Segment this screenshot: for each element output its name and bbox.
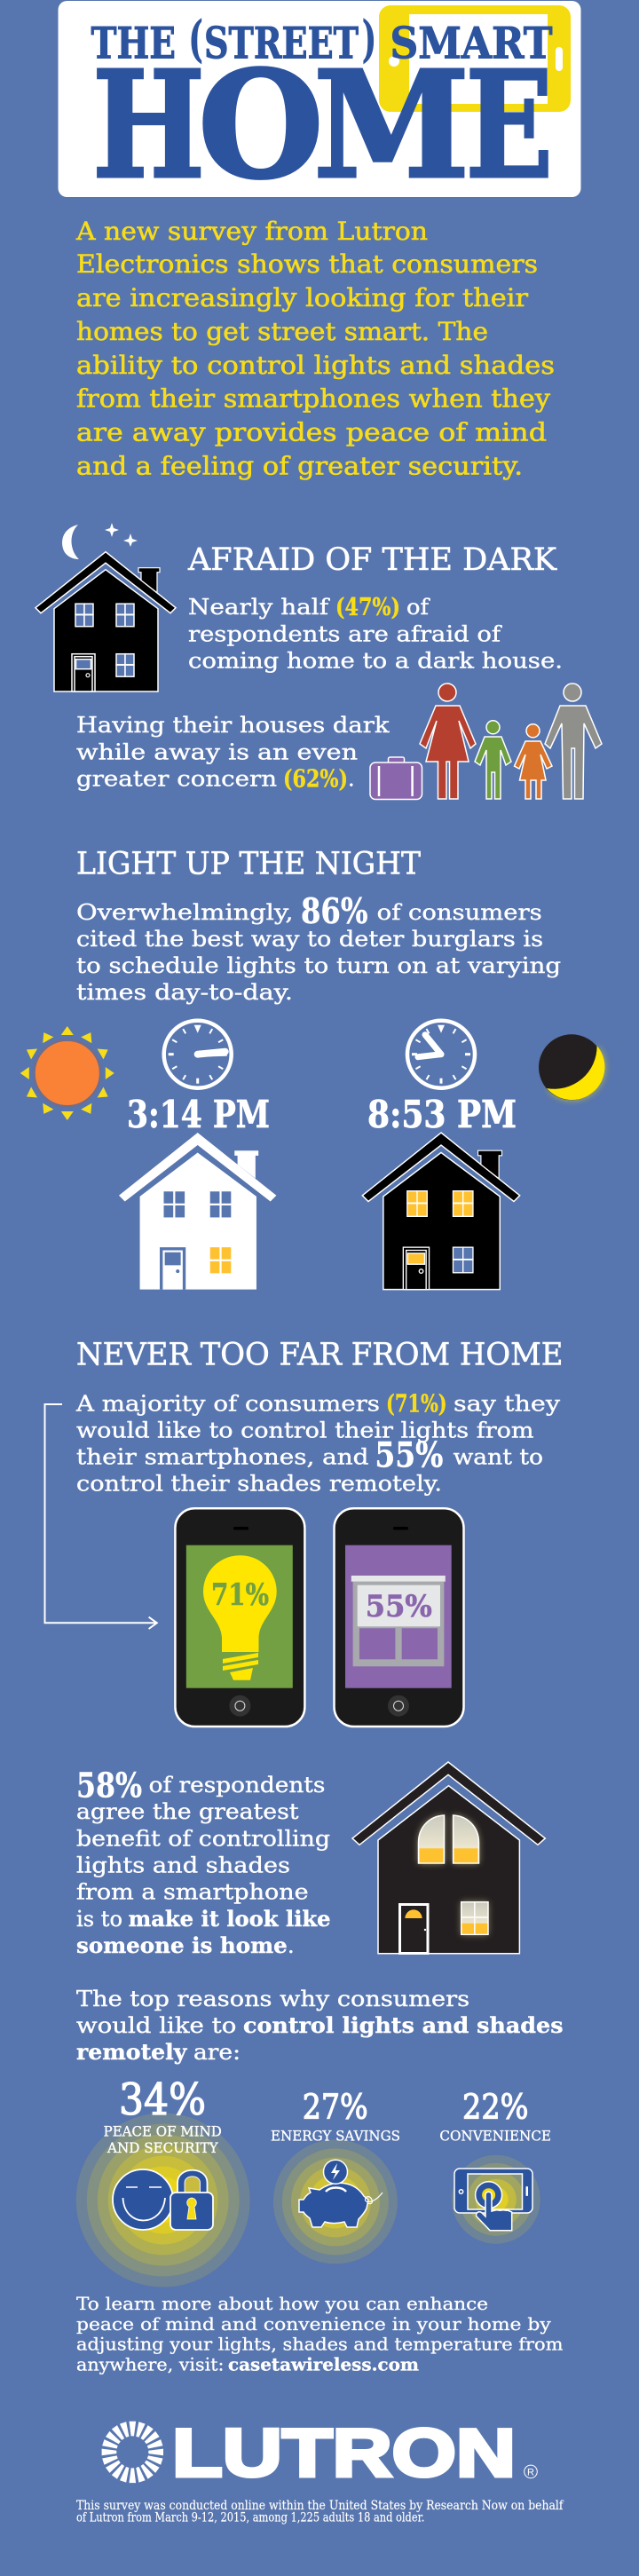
text: houses dark while away: (62%) bbox=[283, 766, 348, 794]
text: 58% of respondents: agree the greatest bbox=[76, 1799, 299, 1824]
header card bbox=[59, 1, 580, 212]
icon: sun bbox=[20, 1026, 114, 1120]
title: STREET bbox=[204, 18, 359, 69]
stat: 22% convenience bbox=[439, 2087, 551, 2145]
text: top reasons: control lights and shades bbox=[243, 2012, 563, 2038]
icon: tablet with hand bbox=[454, 2169, 532, 2231]
icon: smiley and padlock bbox=[113, 2169, 213, 2230]
icon: sunburst bbox=[102, 2422, 163, 2483]
text: nearly half: coming home to a dark house. bbox=[188, 649, 563, 674]
header card: M bbox=[313, 39, 469, 212]
icon: moon and stars bbox=[62, 523, 138, 559]
icon: lit house bbox=[352, 1762, 545, 1954]
title: THE bbox=[91, 18, 176, 69]
stat: 27% energy savings bbox=[271, 2087, 400, 2145]
stat: 34% peace of mind: 34% bbox=[119, 2074, 206, 2125]
text: top reasons: The top reasons why consumers bbox=[76, 1987, 469, 2011]
title bbox=[91, 10, 552, 69]
text: 58% of respondents: make it look like bbox=[129, 1906, 331, 1932]
heading: afraid of the dark: AFRAID OF THE DARK bbox=[187, 542, 557, 578]
footnote: of Lutron from March 9-12, 2015, among 1,225 adults 18 and older. bbox=[76, 2510, 424, 2525]
label: 55%: 55% bbox=[366, 1589, 432, 1624]
icon: door bbox=[399, 1905, 428, 1953]
text: majority of consumers: (71%) bbox=[386, 1390, 447, 1418]
text: 58% of respondents bbox=[76, 1765, 331, 1958]
text: nearly half bbox=[188, 594, 563, 674]
text: top reasons: remotely bbox=[76, 2039, 187, 2065]
intro text: are increasingly looking for their bbox=[76, 283, 529, 312]
text: 58% of respondents: benefit of controlling bbox=[76, 1826, 330, 1851]
label: 71%: 71% bbox=[211, 1577, 269, 1613]
stat: 27% energy savings: 27% bbox=[303, 2087, 368, 2127]
glow rings: energy savings bbox=[273, 2139, 398, 2264]
text: nearly half: (47%) bbox=[335, 594, 400, 621]
arrow: text to phones bbox=[44, 1404, 157, 1629]
text: learn more: To learn more about how you can enhance bbox=[76, 2294, 488, 2314]
icon: dark house bbox=[36, 552, 176, 691]
text: houses dark while away: while away is an even bbox=[76, 739, 358, 764]
stat: 22% convenience: CONVENIENCE bbox=[439, 2128, 551, 2145]
text: houses dark while away bbox=[76, 713, 390, 794]
intro text: from their smartphones when they bbox=[76, 384, 550, 414]
text: majority of consumers: would like to control their lights from bbox=[76, 1418, 534, 1442]
label: 8:53 PM: 8:53 PM bbox=[367, 1093, 517, 1136]
header card: E bbox=[465, 39, 553, 212]
icon: phone with shade bbox=[334, 1508, 463, 1727]
title: ) bbox=[362, 10, 376, 67]
icon: man bbox=[545, 684, 602, 799]
icon: piggy bank and coin bbox=[299, 2160, 383, 2227]
text: overwhelmingly: Overwhelmingly, bbox=[76, 900, 293, 925]
footnote bbox=[76, 2499, 564, 2525]
text: learn more: casetawireless.com bbox=[228, 2354, 419, 2375]
registered mark: R bbox=[527, 2468, 534, 2478]
header card: O bbox=[198, 38, 324, 211]
intro text: are away provides peace of mind bbox=[76, 417, 547, 446]
text: 58% of respondents: 58% bbox=[76, 1765, 142, 1805]
text: 58% of respondents: lights and shades bbox=[76, 1853, 290, 1877]
text: 58% of respondents: of respondents bbox=[149, 1773, 325, 1798]
text: houses dark while away: Having their houses dark bbox=[76, 713, 390, 738]
glow rings: peace of mind bbox=[76, 2113, 250, 2287]
intro text bbox=[75, 217, 555, 481]
text: learn more: anywhere, visit: bbox=[76, 2354, 224, 2375]
icon: phone with bulb bbox=[175, 1508, 304, 1727]
text: houses dark while away: greater concern bbox=[76, 767, 277, 792]
icon: family with suitcase bbox=[370, 684, 602, 799]
text: learn more: peace of mind and convenience in your home by bbox=[76, 2314, 551, 2335]
text: nearly half: Nearly half bbox=[188, 595, 330, 620]
text: top reasons: would like to bbox=[76, 2013, 236, 2038]
heading: never too far from home: NEVER TOO FAR FROM HOME bbox=[76, 1338, 563, 1373]
text: majority of consumers bbox=[75, 1390, 561, 1496]
text: overwhelmingly: times day-to-day. bbox=[76, 980, 293, 1005]
stat: 27% energy savings: ENERGY SAVINGS bbox=[271, 2128, 400, 2145]
stat: 22% convenience: 22% bbox=[462, 2087, 529, 2127]
text: 58% of respondents: . bbox=[288, 1933, 295, 1958]
text: overwhelmingly: cited the best way to deter burglars is bbox=[76, 927, 543, 952]
icon: light bulb bbox=[203, 1555, 277, 1680]
text: majority of consumers: their smartphones, and bbox=[76, 1444, 369, 1469]
icon: girl bbox=[515, 724, 552, 799]
icon: arched windows bbox=[419, 1815, 479, 1863]
intro text: and a feeling of greater security. bbox=[76, 452, 523, 481]
text: top reasons: are: bbox=[193, 2040, 241, 2065]
text: overwhelmingly: 86% bbox=[301, 891, 367, 932]
icon: suitcase bbox=[370, 757, 422, 799]
heading: light up the night: LIGHT UP THE NIGHT bbox=[76, 846, 421, 881]
icon: yellow smartphone bbox=[379, 5, 571, 112]
icon: lower window bbox=[462, 1902, 488, 1934]
intro text: A new survey from Lutron bbox=[75, 217, 428, 246]
text: majority of consumers: want to bbox=[454, 1444, 543, 1469]
text: learn more: adjusting your lights, shades and temperature from bbox=[76, 2334, 563, 2354]
text: nearly half: respondents are afraid of bbox=[188, 622, 502, 647]
icon: woman bbox=[420, 684, 476, 799]
stat: 34% peace of mind: PEACE OF MIND bbox=[104, 2123, 222, 2140]
intro text: Electronics shows that consumers bbox=[76, 249, 538, 279]
text: overwhelmingly: of consumers bbox=[377, 900, 542, 925]
header card: H bbox=[92, 38, 205, 212]
text: overwhelmingly bbox=[76, 891, 561, 1005]
text: majority of consumers: 55% bbox=[375, 1434, 443, 1475]
intro text: ability to control lights and shades bbox=[76, 351, 555, 380]
stat: 34% peace of mind: AND SECURITY bbox=[106, 2139, 218, 2156]
icon: boy bbox=[475, 721, 511, 799]
text: nearly half: of bbox=[406, 595, 430, 620]
text: 58% of respondents: is to bbox=[76, 1907, 122, 1932]
icon: moon crescent bbox=[539, 1034, 604, 1100]
stat: 34% peace of mind bbox=[104, 2074, 222, 2156]
icon: window shade bbox=[351, 1576, 446, 1666]
logo: Lutron bbox=[102, 2415, 537, 2491]
text: houses dark while away: . bbox=[348, 767, 355, 792]
text: top reasons bbox=[76, 1987, 563, 2065]
registered mark bbox=[525, 2465, 537, 2478]
title: SMART bbox=[390, 18, 552, 69]
text: overwhelmingly: to schedule lights to turn on at varying bbox=[76, 953, 561, 978]
icon: clock 8:53 bbox=[407, 1021, 475, 1088]
footnote: This survey was conducted online within the United States by Research Now on behalf bbox=[76, 2499, 564, 2513]
title: ( bbox=[189, 10, 203, 67]
text: majority of consumers: control their shades remotely. bbox=[76, 1471, 442, 1496]
text: majority of consumers: say they bbox=[454, 1391, 561, 1416]
icon: dark evening house bbox=[362, 1133, 520, 1290]
label: 3:14 PM: 3:14 PM bbox=[127, 1093, 270, 1136]
intro text: homes to get street smart. The bbox=[76, 317, 488, 346]
icon: clock 3:14 bbox=[164, 1021, 232, 1088]
text: 58% of respondents: someone is home bbox=[76, 1932, 288, 1958]
text: majority of consumers: A majority of consumers bbox=[75, 1391, 380, 1416]
glow rings: convenience bbox=[452, 2155, 540, 2244]
text: 58% of respondents: from a smartphone bbox=[76, 1879, 309, 1904]
icon: white daytime house bbox=[119, 1133, 276, 1290]
text: learn more bbox=[76, 2294, 563, 2375]
wordmark: LUTRON bbox=[172, 2415, 516, 2491]
